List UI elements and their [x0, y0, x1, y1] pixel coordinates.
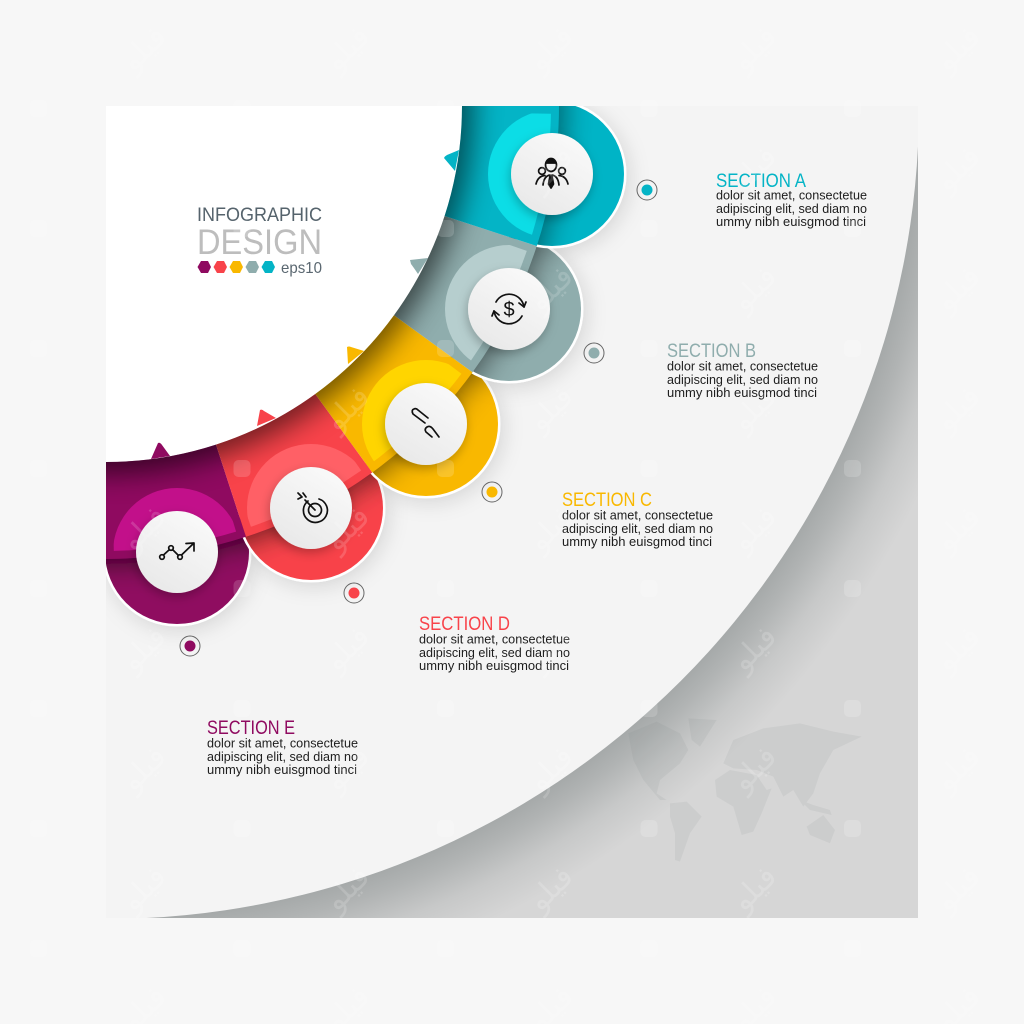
text: section A: adipiscing elit, sed diam no: [716, 201, 867, 216]
curved light sheet: [106, 106, 918, 918]
text: section B: [667, 341, 818, 400]
colour hexagons: [198, 261, 275, 273]
band C: [315, 315, 472, 472]
marker A: [637, 180, 657, 200]
text: section C: adipiscing elit, sed diam no: [562, 521, 713, 536]
highlight arc E: [114, 488, 236, 551]
text: section C: [562, 490, 713, 549]
text: section C: dolor sit amet, consectetue: [562, 508, 713, 522]
segment A: teal: [444, 106, 559, 246]
text: section D: adipiscing elit, sed diam no: [419, 645, 570, 660]
ring E: [106, 538, 260, 636]
text: section E: dolor sit amet, consectetue: [207, 736, 358, 750]
marker B: [584, 343, 604, 363]
text: section A: SECTION A: [716, 171, 806, 192]
ring C: [359, 356, 510, 508]
highlight arc A: [488, 114, 551, 235]
icon circle E: [136, 511, 218, 593]
ring A: [516, 106, 636, 258]
band D: [216, 394, 372, 537]
text: section D: [419, 614, 570, 673]
text: section E: [207, 718, 358, 777]
world map: [628, 718, 862, 862]
highlight arc B: [445, 245, 527, 360]
icon: chain link: [412, 409, 439, 437]
icon: dollar cycle: $: [503, 299, 515, 321]
panel: square sheet: [106, 106, 918, 918]
icon: people: [536, 158, 568, 188]
ring B: [452, 237, 592, 394]
text: section B: dolor sit amet, consectetue: [667, 358, 818, 374]
text: section A: dolor sit amet, consectetue: [716, 188, 867, 202]
text: section D: dolor sit amet, consectetue: [419, 632, 570, 646]
highlight arc C: [362, 360, 462, 461]
eps label: eps10: [281, 260, 322, 277]
text: section D: SECTION D: [419, 614, 510, 635]
ring D: [239, 474, 394, 592]
icon circle B: [468, 268, 550, 350]
segment C: yellow: [315, 315, 472, 472]
segment E: purple: [106, 442, 246, 559]
band B: [394, 216, 537, 372]
pointer A: [444, 150, 459, 171]
icon: dollar cycle: [492, 294, 526, 324]
segment D: red: [216, 394, 372, 537]
icon circle A: [511, 133, 593, 215]
title block: [197, 204, 322, 277]
text: section A: [716, 171, 867, 229]
marker C: [482, 482, 502, 502]
marker E: [180, 636, 200, 656]
white quarter circle: [106, 106, 462, 462]
pointer E: [151, 443, 170, 459]
text: section E: adipiscing elit, sed diam no: [207, 749, 358, 764]
pointer B: [410, 258, 428, 274]
text: section B: SECTION B: [667, 341, 756, 362]
text: section A: ummy nibh euisgmod tinci: [716, 214, 866, 229]
text: section C: SECTION C: [562, 490, 652, 511]
icon: target: [298, 493, 327, 522]
icon circle C: [385, 383, 467, 465]
text: section E: SECTION E: [207, 718, 295, 739]
grey corner background: [149, 150, 918, 918]
icon circle D: [270, 467, 352, 549]
pointer C: [347, 346, 364, 364]
title: design: DESIGN: [197, 223, 322, 262]
highlight arc D: [247, 444, 361, 526]
text: section B: adipiscing elit, sed diam no: [667, 372, 818, 387]
text: section C: ummy nibh euisgmod tinci: [562, 534, 712, 549]
band A: [444, 106, 559, 246]
band E: [106, 444, 246, 559]
text: section D: ummy nibh euisgmod tinci: [419, 658, 569, 673]
text: section E: ummy nibh euisgmod tinci: [207, 762, 357, 777]
marker D: [344, 583, 364, 603]
segment B: grey-teal: [394, 216, 537, 372]
pointer D: [257, 410, 276, 426]
icon: growth line: [160, 543, 194, 559]
outer rings: [106, 106, 636, 636]
text: section B: ummy nibh euisgmod tinci: [667, 385, 817, 400]
sheet shadow: [148, 148, 918, 918]
title: infographic: INFOGRAPHIC: [197, 204, 322, 226]
